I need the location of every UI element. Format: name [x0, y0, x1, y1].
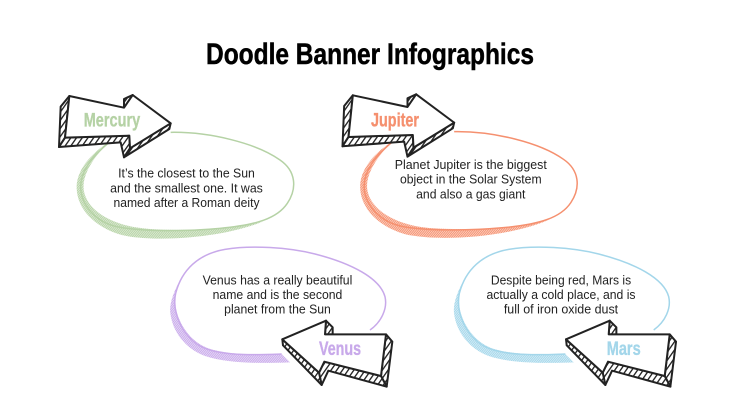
text: Jupiter description	[395, 157, 547, 201]
panel: Jupiter	[342, 94, 577, 238]
speech bubble: Venus	[170, 247, 386, 363]
icon: Mercury arrow	[59, 95, 171, 157]
panel: Mars	[454, 247, 676, 387]
speech bubble: Mars	[454, 247, 669, 363]
text: Venus description: name and is the second	[213, 287, 342, 302]
speech bubble: Jupiter	[360, 132, 577, 238]
text: Mercury description	[110, 166, 263, 210]
icon: Mars arrow	[566, 321, 676, 387]
text: Mars description: Despite being red, Mars is	[491, 272, 632, 287]
panel: Mercury	[59, 95, 294, 239]
text: Venus description	[203, 272, 352, 317]
text: Mars description: full of iron oxide dust	[504, 302, 619, 317]
label: Mercury: Mercury	[84, 110, 140, 132]
text: Mars description	[486, 272, 636, 317]
text: Jupiter description: Planet Jupiter is the biggest	[395, 157, 547, 172]
text: Mercury description: and the smallest one. It was	[110, 180, 263, 195]
text: Jupiter description: object in the Solar System	[400, 172, 542, 187]
icon: Venus arrow	[282, 321, 392, 387]
label: Jupiter: Jupiter	[371, 110, 419, 132]
text: Mercury description: It’s the closest to the Sun	[118, 166, 255, 181]
text: Mercury description: named after a Roman deity	[114, 195, 260, 210]
icon: Jupiter arrow	[342, 94, 454, 157]
label: Mars: Mars	[607, 338, 641, 360]
text: Venus description: planet from the Sun	[224, 302, 331, 317]
text: Venus description: Venus has a really beautiful	[203, 272, 352, 287]
text: Jupiter description: and also a gas giant	[416, 186, 526, 201]
speech bubble: Mercury	[77, 132, 294, 239]
label: Venus: Venus	[319, 338, 361, 360]
title: Doodle Banner Infographics	[206, 38, 534, 71]
panel: Venus	[170, 247, 392, 387]
text: Mars description: actually a cold place, and is	[486, 287, 636, 302]
